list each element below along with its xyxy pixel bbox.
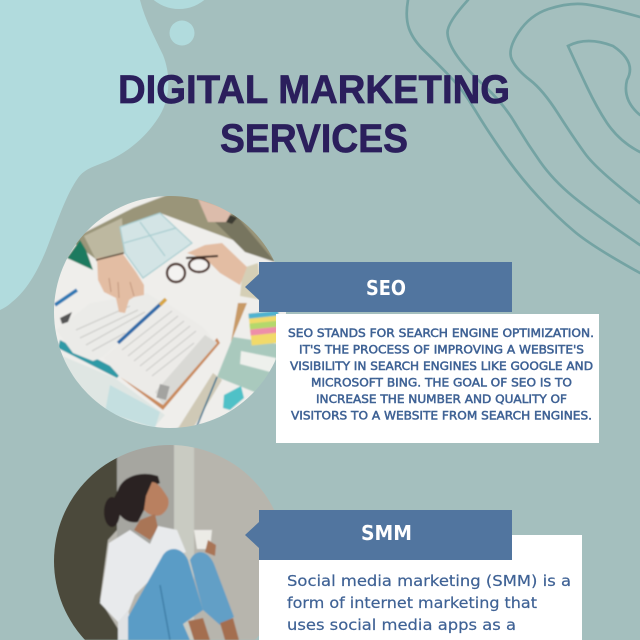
SEO body text: MICROSOFT BING. THE GOAL OF SEO IS TO	[311, 376, 572, 390]
lower strips	[177, 373, 222, 430]
glasses	[167, 258, 209, 282]
face and neck	[144, 482, 169, 516]
SEO body text: VISITORS TO A WEBSITE FROM SEARCH ENGINES.	[291, 408, 592, 422]
blue pen	[55, 290, 77, 305]
banner: SEO heading	[245, 262, 512, 312]
contour line decoration	[407, 0, 640, 273]
SEO body text: IT'S THE PROCESS OF IMPROVING A WEBSITE'S	[299, 342, 584, 356]
book	[58, 340, 122, 378]
SEO body text: SEO STANDS FOR SEARCH ENGINE OPTIMIZATION.	[288, 326, 594, 340]
sweater	[76, 196, 274, 262]
title: SERVICES	[220, 117, 408, 161]
SMM body text	[287, 572, 571, 640]
SMM body text: Social media marketing (SMM) is a	[287, 572, 571, 590]
ankles	[188, 618, 210, 640]
sleeve on right	[240, 262, 259, 300]
left hand	[97, 254, 144, 313]
title	[118, 68, 510, 161]
hair	[114, 474, 160, 522]
highlighter	[223, 386, 244, 410]
title: DIGITAL MARKETING	[118, 68, 510, 112]
background blob: top left	[0, 0, 219, 310]
banner: SMM heading: SMM	[361, 521, 412, 545]
panel: SMM description	[259, 535, 582, 640]
jeans	[128, 549, 203, 640]
green plant corner	[67, 240, 93, 270]
SMM body text: form of internet marketing that	[287, 594, 537, 612]
right hand	[187, 243, 247, 285]
banner: SMM heading	[245, 510, 512, 560]
SEO body text: INCREASE THE NUMBER AND QUALITY OF	[316, 392, 567, 406]
photo: desk with open book	[50, 190, 290, 435]
SEO body text	[288, 326, 594, 422]
grid paper	[120, 213, 192, 278]
panel: SEO description	[276, 314, 599, 443]
photo: woman sitting with coffee	[54, 445, 274, 640]
shirt	[100, 526, 186, 622]
SEO body text: VISIBILITY IN SEARCH ENGINES LIKE GOOGLE AND	[290, 359, 593, 373]
stickies and folder	[231, 303, 247, 342]
SMM body text: uses social media apps as a	[287, 616, 516, 634]
coffee cup	[194, 530, 212, 549]
banner: SEO heading: SEO	[366, 276, 406, 300]
pencil	[118, 300, 165, 343]
